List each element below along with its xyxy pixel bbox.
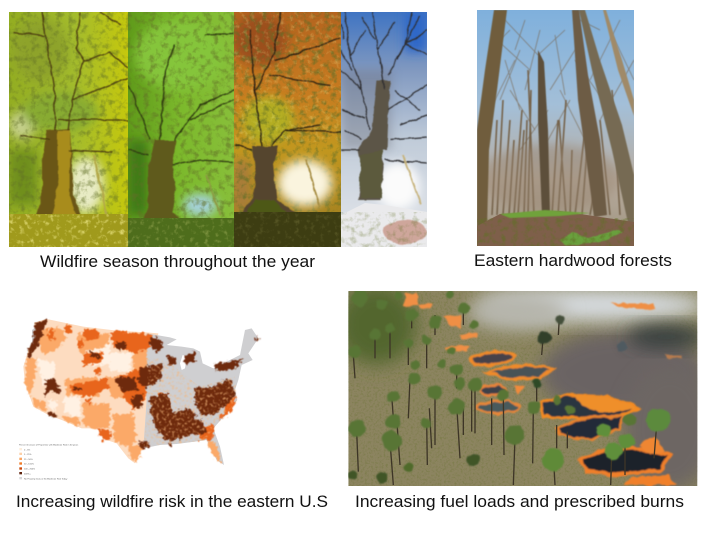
map legend: 50 - 100% bbox=[24, 464, 34, 466]
photo slice: autumn orange tree bbox=[232, 12, 341, 247]
pine tree trunks bbox=[353, 305, 657, 485]
thick foreground trunks bbox=[477, 10, 634, 232]
map: palest counties in the interior west bbox=[37, 340, 132, 417]
caption: fuel loads and prescribed burns: Increasing fuel loads and prescribed burns bbox=[355, 493, 684, 511]
panel: eastern hardwood forest photo bbox=[477, 10, 634, 246]
autumn trunk and branches bbox=[234, 12, 341, 216]
winter trunk and branches bbox=[341, 12, 427, 205]
map: Lake Michigan gap bbox=[180, 355, 187, 370]
map legend bbox=[19, 443, 78, 480]
forest floor bbox=[477, 211, 634, 246]
chart: US wildfire risk map bbox=[19, 319, 259, 480]
map legend: 25 - 50% bbox=[24, 459, 33, 461]
map: mid orange counties bbox=[25, 327, 222, 463]
background thin trunks bbox=[490, 20, 634, 215]
distant flame lines bbox=[403, 292, 683, 358]
map: county speckle over the southeast bbox=[143, 357, 240, 450]
map base: grey eastern counties bbox=[143, 328, 258, 465]
map legend: 0 - 5% bbox=[24, 449, 30, 451]
burn patches bbox=[471, 350, 677, 485]
map: grey Washington coast bbox=[32, 326, 37, 347]
map base: light western counties bbox=[23, 319, 158, 463]
pine tree crowns bbox=[347, 290, 670, 484]
caption: wildfire season: Wildfire season throughout the year bbox=[40, 253, 316, 271]
map legend: Percent Increase of Properties with Moderate Risk in 30 years bbox=[19, 443, 78, 446]
map: grey gaps inside the southeast bbox=[168, 382, 203, 422]
map: dark brown counties bbox=[27, 319, 259, 448]
panel: prescribed burn aerial photo bbox=[348, 291, 698, 486]
spring trunk and branches bbox=[14, 12, 128, 222]
map legend: 200%+ bbox=[24, 473, 32, 475]
map legend: No Property Data or No Moderate Risk Today bbox=[24, 477, 68, 480]
map: strong orange counties bbox=[48, 323, 237, 442]
smoke and distant vegetation bbox=[348, 291, 698, 486]
caption: eastern hardwood forests: Eastern hardwood forests bbox=[474, 252, 672, 270]
map legend: 100 - 200% bbox=[24, 469, 35, 471]
photo slice: spring yellow-green tree bbox=[9, 12, 128, 247]
map legend: 5 - 25% bbox=[24, 454, 32, 456]
summer trunk and branches bbox=[128, 34, 234, 226]
caption: increasing wildfire risk: Increasing wildfire risk in the eastern U.S bbox=[16, 493, 328, 511]
panel: seasonal tree photo strip bbox=[9, 12, 427, 247]
photo slice: summer bright green tree bbox=[128, 12, 234, 247]
photo slice: winter bare snowy tree bbox=[341, 12, 427, 247]
